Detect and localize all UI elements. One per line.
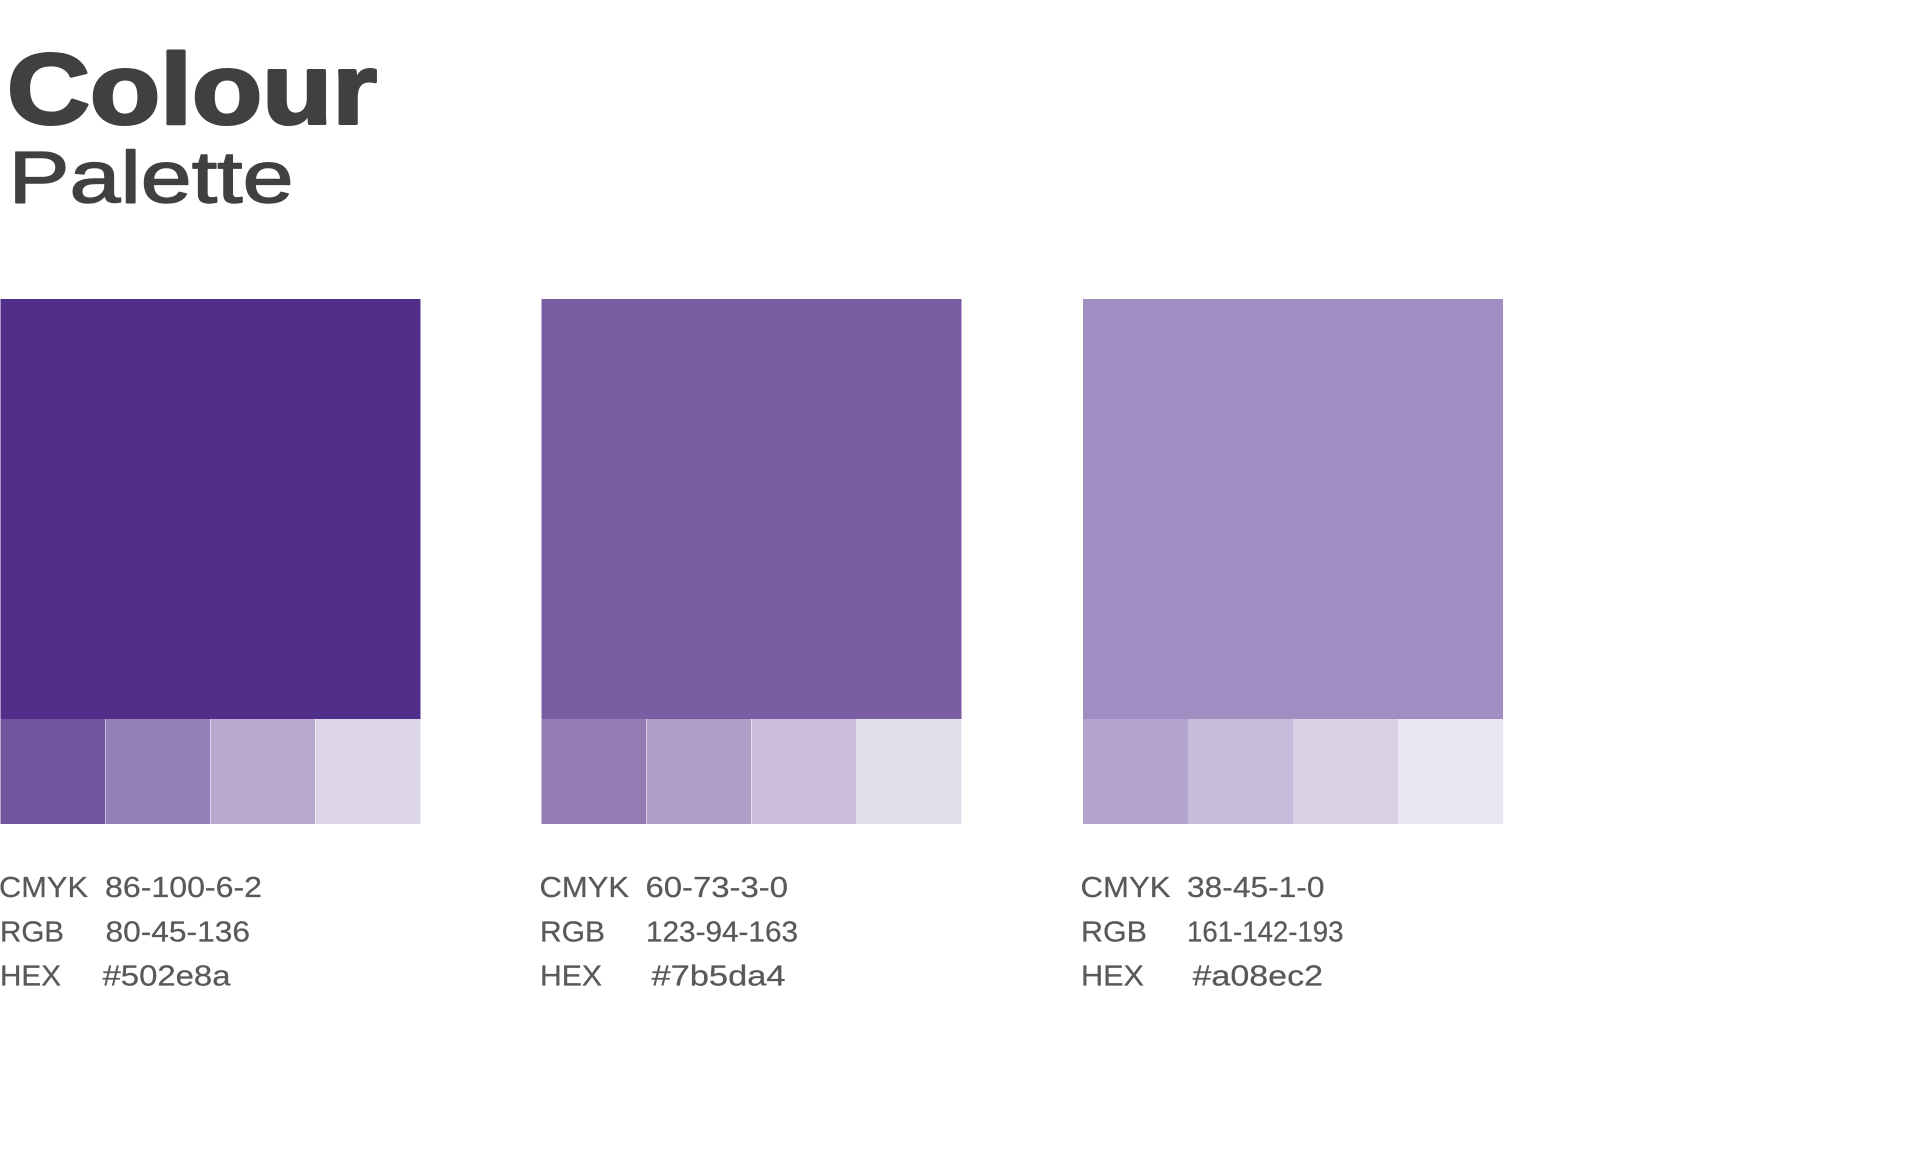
main swatch 2 <box>542 299 962 719</box>
values 1: #502e8a <box>102 960 231 992</box>
values 3: #a08ec2 <box>1192 960 1323 992</box>
values 1: RGB <box>0 916 64 948</box>
main swatch 3 <box>1083 299 1503 719</box>
heading: Colour: Colour <box>7 34 377 146</box>
values 3: HEX <box>1081 960 1144 992</box>
title <box>7 34 377 218</box>
values 1: 86-100-6-2 <box>105 872 262 904</box>
panel: colour 2 <box>540 299 962 992</box>
values 2: CMYK <box>540 872 630 904</box>
values 1: 80-45-136 <box>106 916 250 948</box>
values 2 <box>540 872 798 992</box>
values 3: RGB <box>1081 916 1147 948</box>
values 2: HEX <box>540 960 602 992</box>
tint row 2 <box>542 719 962 824</box>
values 2: 123-94-163 <box>646 916 798 948</box>
values 2: RGB <box>540 916 605 948</box>
values 3: CMYK <box>1080 872 1171 904</box>
values 3 <box>1080 872 1344 992</box>
tint row 3 <box>1083 719 1503 824</box>
values 1: CMYK <box>0 872 89 904</box>
values 1 <box>0 872 262 992</box>
heading: Palette: Palette <box>8 138 294 218</box>
values 2: 60-73-3-0 <box>646 872 788 904</box>
panel: colour 1 <box>0 299 420 992</box>
values 1: HEX <box>0 960 61 992</box>
tint row 1 <box>0 719 420 824</box>
values 3: 161-142-193 <box>1187 916 1344 948</box>
values 2: #7b5da4 <box>652 960 786 992</box>
main swatch 1 <box>0 299 420 719</box>
values 3: 38-45-1-0 <box>1187 872 1324 904</box>
panel: colour 3 <box>1080 299 1503 992</box>
